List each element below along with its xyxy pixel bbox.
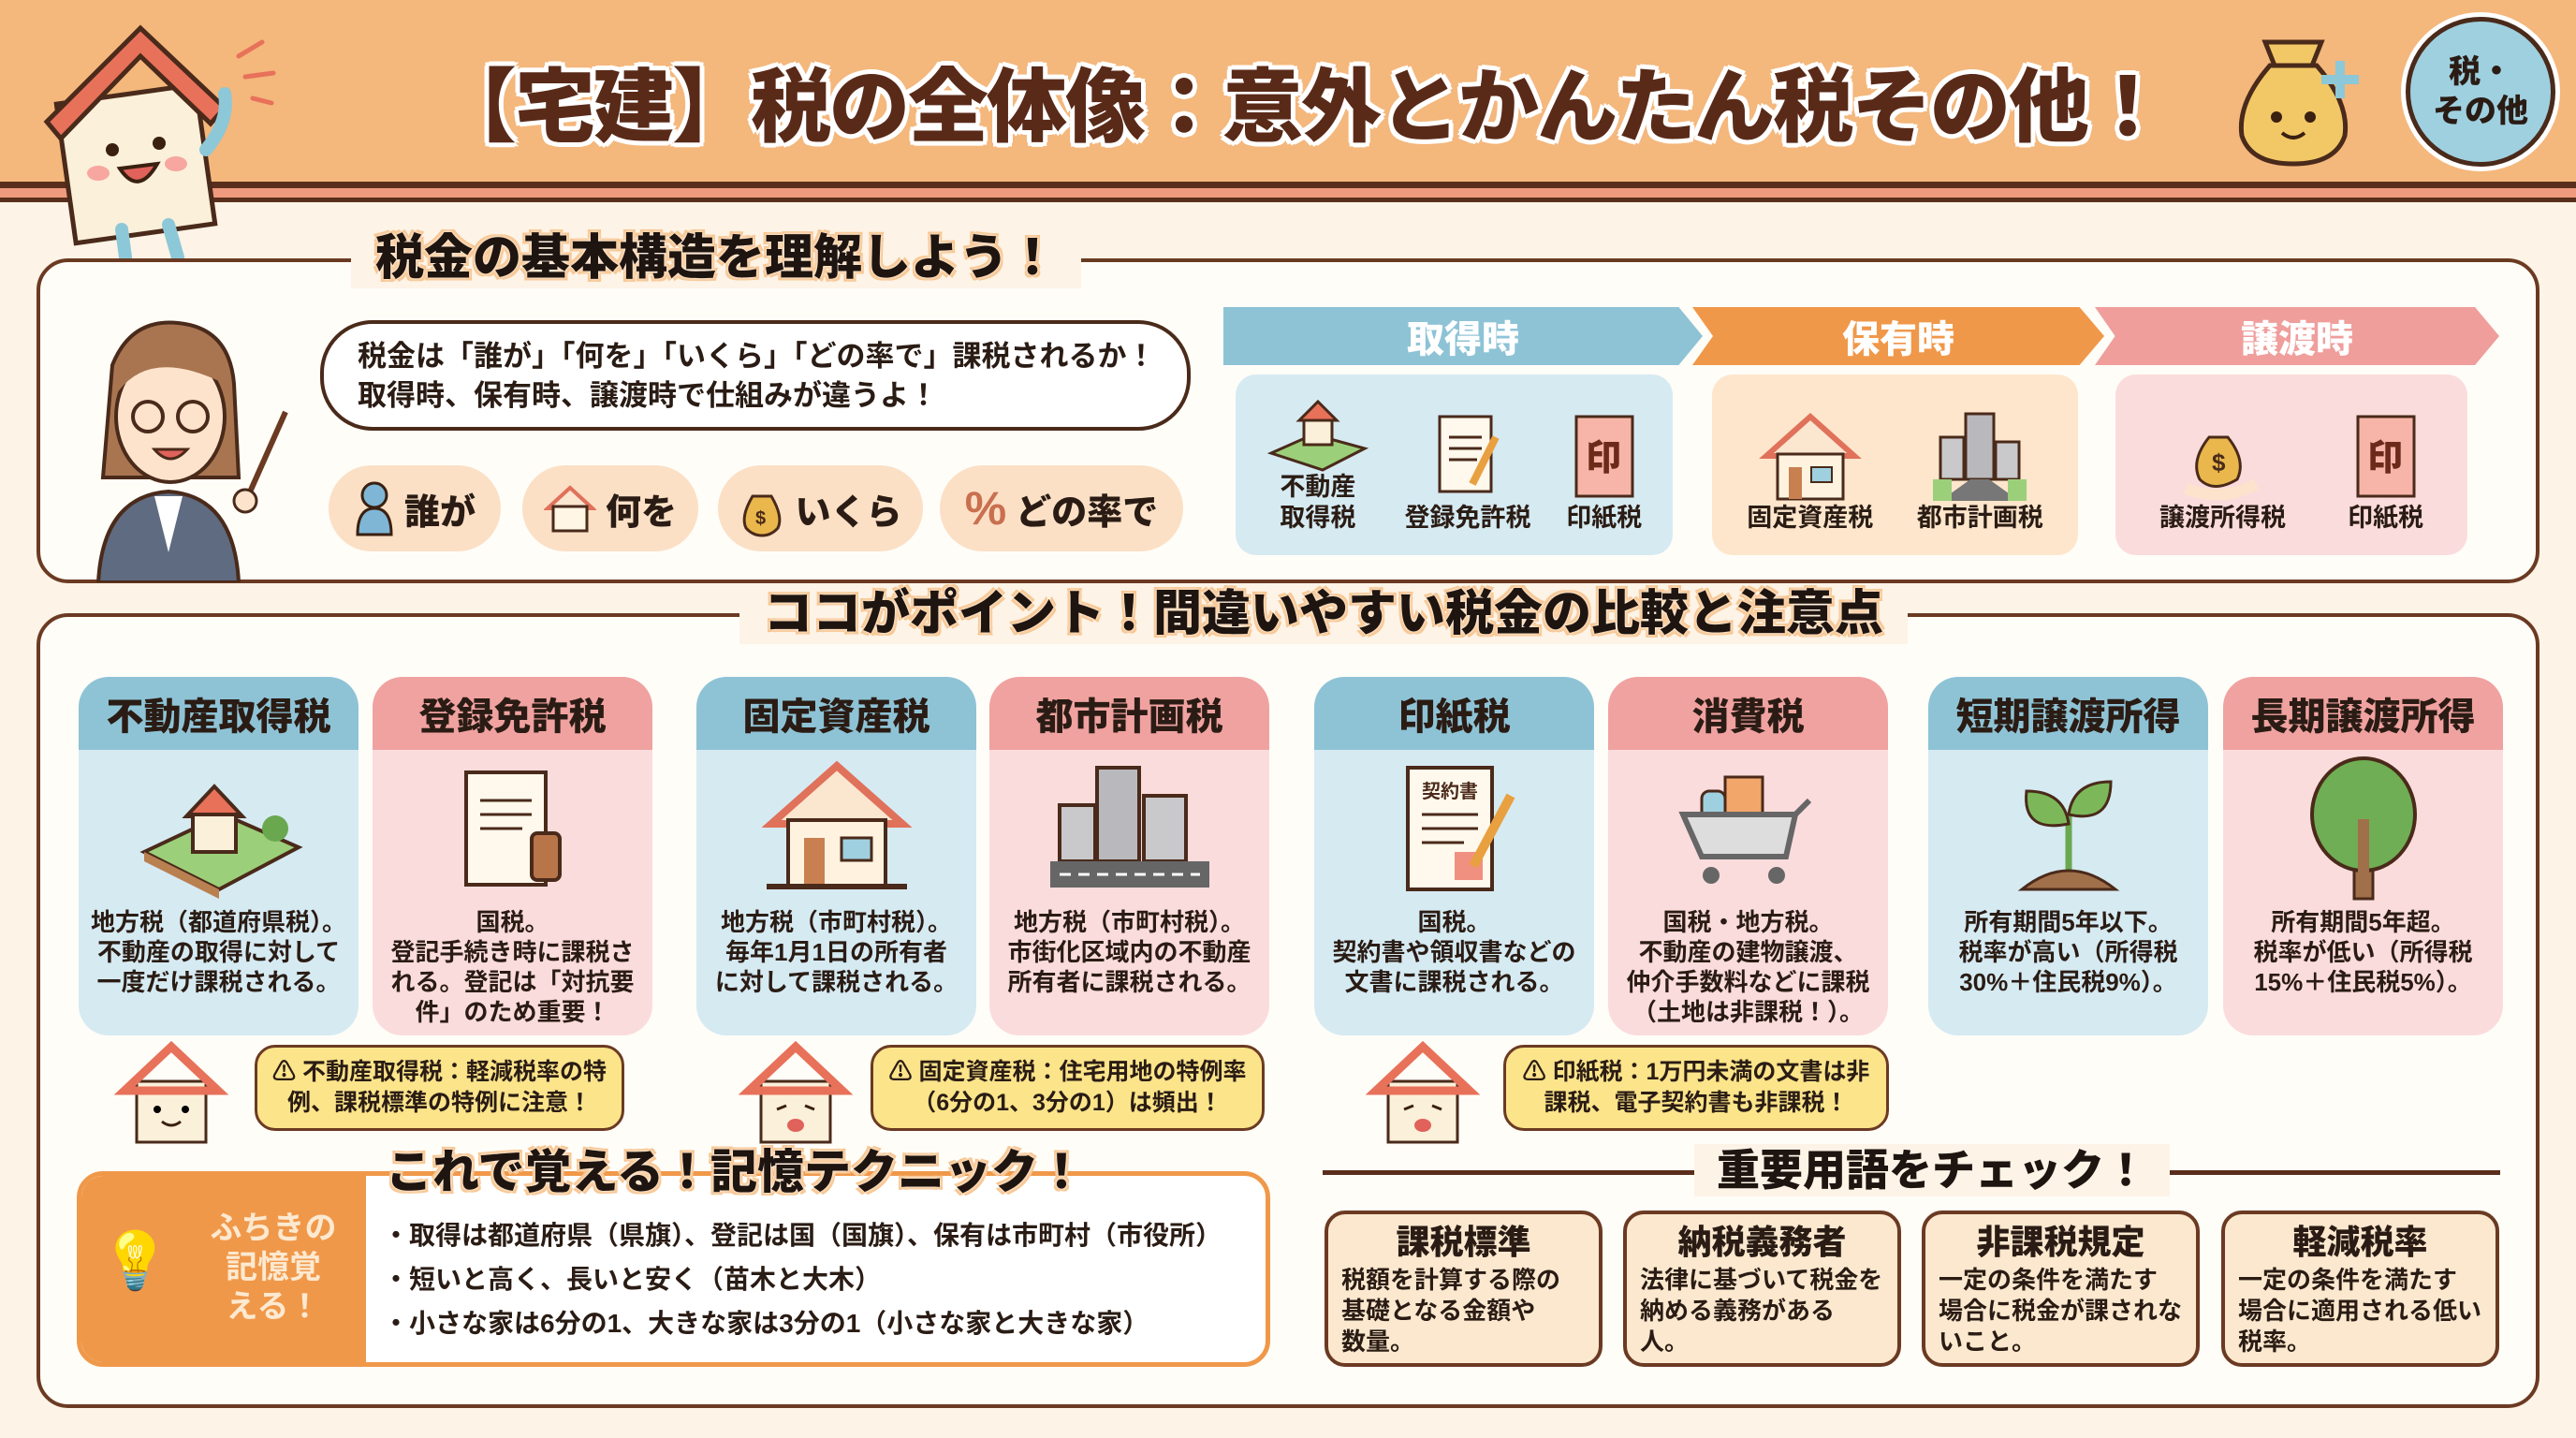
pill: どの率で (940, 465, 1183, 551)
warning: 印紙税: ⚠ 印紙税：1万円未満の文書は非課税、電子契約書も非課税！ (1523, 1059, 1869, 1116)
card: 長期譲渡所得: 税率が低い（所得税 (2253, 938, 2473, 966)
heading: memory: これで覚える！記憶テクニック！ (386, 1146, 1085, 1198)
term: 課税標準: 数量。 (1341, 1328, 1414, 1356)
memory bullets (383, 1221, 1222, 1338)
card: 不動産取得税: 地方税（都道府県税）。 (91, 908, 346, 936)
pill: 誰が (329, 465, 501, 551)
card: 短期譲渡所得: 30%＋住民税9%）。 (1959, 968, 2177, 996)
badge: 税・その他: その他 (2433, 94, 2528, 129)
term: 納税義務者: 人。 (1640, 1328, 1689, 1356)
mascot house 1 (114, 1041, 228, 1144)
card: 長期譲渡所得: 15%＋住民税5%）。 (2254, 968, 2472, 996)
term: 軽減税率: 一定の条件を満たす (2238, 1266, 2457, 1294)
card: 不動産取得税: 不動産の取得に対して (97, 938, 340, 966)
card: 消費税: 不動産の建物譲渡、 (1638, 938, 1857, 966)
card: 登録免許税: 件」のため重要！ (415, 998, 610, 1026)
timeline arrow: 譲渡時 (2095, 307, 2499, 365)
card: 短期譲渡所得: 所有期間5年以下。 (1964, 908, 2173, 936)
card: 消費税: 消費税 (1692, 697, 1805, 738)
card: 登録免許税: れる。登記は「対抗要 (390, 968, 635, 996)
mascot: house character (43, 24, 275, 258)
card: 不動産取得税: 不動産取得税 (107, 697, 331, 738)
pill: 何を: 何を (606, 492, 677, 532)
text: 重要用語をチェック！ (1717, 1146, 2147, 1195)
timeline arrow: 保有時: 保有時 (1842, 319, 1954, 360)
term: 軽減税率 (2221, 1211, 2499, 1367)
speech bubble (320, 320, 1191, 431)
pill: どの率で: % (965, 482, 1006, 535)
heading: points: ココがポイント！間違いやすい税金の比較と注意点 (764, 587, 1883, 641)
box: transfer taxes: $ (2211, 448, 2226, 477)
card: 固定資産税 (696, 677, 976, 1035)
badge: 税・その他 (2406, 17, 2555, 167)
term: 納税義務者 (1623, 1211, 1901, 1367)
title: 【宅建】税の全体像：意外とかんたん税その他！ (436, 63, 2166, 153)
term: 課税標準: 税額を計算する際の (1341, 1266, 1560, 1294)
timeline arrow: 譲渡時: 譲渡時 (2241, 319, 2353, 360)
timeline arrow: 保有時 (1692, 307, 2104, 365)
pill: いくら (718, 465, 923, 551)
card: 固定資産税: に対して課税される。 (715, 968, 958, 996)
box: holding taxes: 固定資産税 (1747, 504, 1873, 532)
card: 都市計画税: 都市計画税 (1035, 697, 1222, 738)
term: 納税義務者: 法律に基づいて税金を (1640, 1266, 1882, 1294)
term: 納税義務者: 納める義務がある (1640, 1297, 1835, 1325)
speech bubble: 税金は「誰が」「何を」「いくら」「どの率で」課税されるか！ (358, 340, 1155, 373)
card: 登録免許税: 登録免許税 (419, 697, 607, 738)
card: 登録免許税: 登記手続き時に課税さ (390, 938, 635, 966)
heading: key terms (1323, 1170, 2500, 1175)
warning: 不動産取得税: ⚠ 不動産取得税：軽減税率の特例、課税標準の特例に注意！ (272, 1059, 607, 1116)
card: 都市計画税: 所有者に課税される。 (1007, 968, 1251, 996)
box: acquisition taxes (1236, 374, 1673, 555)
panel: points (37, 613, 2539, 1408)
card: 短期譲渡所得: 短期譲渡所得 (1956, 697, 2181, 738)
box: acquisition taxes: 取得税 (1280, 504, 1355, 532)
card: 登録免許税: 国税。 (476, 908, 549, 936)
memory label: える！ (227, 1289, 320, 1325)
card: 固定資産税: 固定資産税 (743, 697, 930, 738)
header band (0, 0, 2576, 202)
card: 都市計画税 (989, 677, 1269, 1035)
box: transfer taxes: 譲渡所得税 (2159, 504, 2286, 532)
box: transfer taxes: 印紙税 (2348, 504, 2423, 532)
card: 不動産取得税 (79, 677, 359, 1035)
term: 軽減税率: 場合に適用される低い (2238, 1297, 2481, 1325)
warning: 印紙税 (1503, 1045, 1889, 1131)
card: 消費税: 仲介手数料などに課税 (1626, 968, 1870, 996)
pill: どの率で: どの率で (1016, 492, 1158, 532)
term: 非課税規定 (1922, 1211, 2200, 1367)
card: 印紙税: 文書に課税される。 (1344, 968, 1563, 996)
card: 短期譲渡所得: 税率が高い（所得税 (1958, 938, 2177, 966)
warning: 固定資産税: ⚠ 固定資産税：住宅用地の特例率（6分の1、3分の1）は頻出！ (889, 1059, 1246, 1116)
card: 長期譲渡所得 (2223, 677, 2503, 1035)
memory label: 記憶覚 (226, 1250, 321, 1285)
pill: いくら: $ (755, 508, 767, 529)
card: 消費税: （土地は非課税！）。 (1632, 998, 1864, 1026)
memory label: 💡 (100, 1229, 170, 1292)
term: 課税標準 (1325, 1211, 1603, 1367)
term: 課税標準: 課税標準 (1396, 1223, 1531, 1261)
term: 非課税規定: 一定の条件を満たす (1939, 1266, 2158, 1294)
card: 印紙税: 契約書 (1421, 781, 1477, 802)
term: 非課税規定: 非課税規定 (1976, 1223, 2145, 1261)
pill: 誰が: 誰が (404, 492, 476, 532)
card: 印紙税: 印紙税 (1398, 697, 1511, 738)
card: 固定資産税: 地方税（市町村税）。 (721, 908, 952, 936)
card: 印紙税: 国税。 (1417, 908, 1490, 936)
box: acquisition taxes: 印紙税 (1566, 504, 1642, 532)
card: 不動産取得税: 一度だけ課税される。 (96, 968, 341, 996)
term: 軽減税率: 軽減税率 (2292, 1223, 2428, 1261)
teacher illustration (96, 320, 288, 582)
memory bullets: ・短いと高く、長いと安く（苗木と大木） (383, 1265, 881, 1294)
term: 非課税規定: 場合に税金が課されな (1939, 1297, 2182, 1325)
box: acquisition taxes: 印 (1586, 439, 1621, 478)
heading: basic structure: 税金の基本構造を理解しよう！ (375, 231, 1057, 286)
card: 印紙税: 契約書や領収書などの (1332, 938, 1576, 966)
memory bullets: ・小さな家は6分の1、大きな家は3分の1（小さな家と大きな家） (383, 1309, 1149, 1338)
box: holding taxes: 都市計画税 (1917, 504, 2043, 532)
memory label (81, 1176, 366, 1362)
timeline arrow: 取得時 (1223, 307, 1703, 365)
badge: 税・その他: 税・ (2449, 54, 2512, 90)
memory bullets: ・取得は都道府県（県旗）、登記は国（国旗）、保有は市町村（市役所） (383, 1221, 1222, 1250)
speech bubble: 取得時、保有時、譲渡時で仕組みが違うよ！ (358, 379, 938, 412)
term: 納税義務者: 納税義務者 (1677, 1223, 1846, 1261)
term: 課税標準: 基礎となる金額や (1341, 1297, 1535, 1325)
memory label: ふちきの (210, 1211, 336, 1246)
mascot house 2 (738, 1041, 854, 1144)
pill: いくら: いくら (795, 492, 902, 532)
card: 消費税: 国税・地方税。 (1662, 908, 1833, 936)
card: 固定資産税: 毎年1月1日の所有者 (725, 938, 947, 966)
card: 長期譲渡所得: 所有期間5年超。 (2271, 908, 2455, 936)
timeline arrow: 取得時: 取得時 (1407, 319, 1519, 360)
card: 都市計画税: 市街化区域内の不動産 (1007, 938, 1251, 966)
box: acquisition taxes: 登録免許税 (1404, 504, 1530, 532)
card: 消費税 (1608, 677, 1888, 1035)
card: 印紙税 (1314, 677, 1594, 1035)
pill: 何を (522, 465, 698, 551)
memory technique box (77, 1171, 1270, 1367)
warning: 不動産取得税 (255, 1045, 624, 1131)
box: transfer taxes: 印 (2366, 439, 2403, 478)
mascot house 3 (1365, 1041, 1481, 1144)
term: 非課税規定: いこと。 (1939, 1328, 2036, 1356)
card: 短期譲渡所得 (1928, 677, 2208, 1035)
panel: basic structure (37, 258, 2539, 583)
box: transfer taxes (2115, 374, 2467, 555)
term: 軽減税率: 税率。 (2238, 1328, 2311, 1356)
icon: money bag (2239, 39, 2359, 167)
card: 都市計画税: 地方税（市町村税）。 (1014, 908, 1245, 936)
box: holding taxes (1712, 374, 2078, 555)
box: acquisition taxes: 不動産 (1280, 473, 1355, 501)
card: 長期譲渡所得: 長期譲渡所得 (2250, 697, 2475, 738)
warning: 固定資産税 (871, 1045, 1265, 1131)
card: 登録免許税 (373, 677, 652, 1035)
